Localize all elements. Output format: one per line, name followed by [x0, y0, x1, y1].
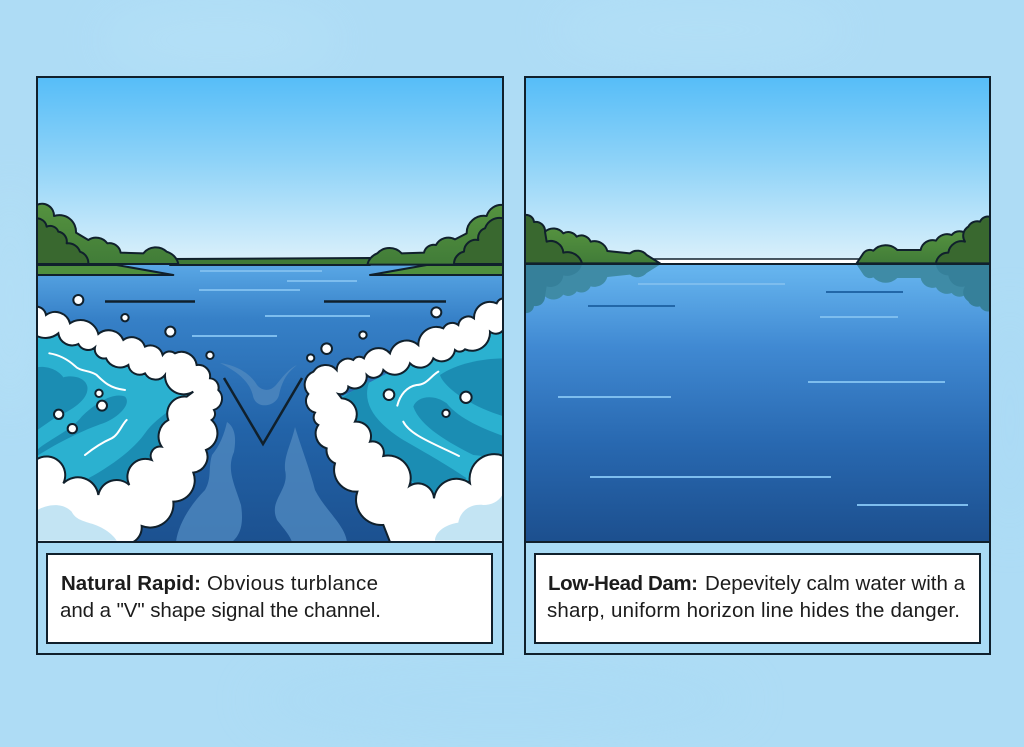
left trees: [525, 215, 660, 263]
far shoreline and banks: [37, 204, 503, 275]
right foam and pool: [305, 298, 507, 542]
water ripples dark: [588, 292, 903, 306]
right trees: [857, 216, 992, 263]
panel frame: [37, 77, 503, 654]
water: [525, 264, 990, 542]
caption: low-head dam: sharp, uniform horizon line hides the danger.: [547, 599, 960, 622]
water ripples: [192, 271, 370, 336]
bubbles: [54, 295, 214, 433]
black surface lines: [105, 300, 446, 303]
caption: low-head dam: Depevitely calm water with a: [705, 572, 966, 595]
scene: rapid illustration: [35, 77, 507, 542]
bubbles: [307, 307, 472, 417]
light foam: [37, 505, 117, 541]
caption: natural rapid: Natural Rapid:: [61, 572, 201, 595]
panel: low-head dam: [525, 77, 992, 654]
water plumes: [176, 363, 347, 542]
sky: [37, 77, 503, 267]
caption: natural rapid: and a "V" shape signal the channel.: [60, 599, 381, 622]
left foam and pool: [35, 295, 222, 542]
sky: [525, 77, 990, 267]
light foam: [435, 495, 502, 541]
waterline: [525, 263, 990, 265]
caption: low-head dam: Low-Head Dam:: [548, 572, 698, 595]
panel frame: [525, 77, 990, 654]
scene: dam illustration: [525, 77, 992, 542]
water: [37, 264, 503, 542]
caption: low-head dam: [535, 554, 980, 643]
water ripples light: [558, 284, 968, 505]
V shape: [224, 378, 302, 444]
panel: natural rapid: [35, 77, 507, 654]
caption: natural rapid: [47, 554, 492, 643]
horizon line: [650, 259, 865, 264]
caption: natural rapid: Obvious turblance: [207, 572, 378, 595]
tree reflections: [525, 265, 992, 313]
